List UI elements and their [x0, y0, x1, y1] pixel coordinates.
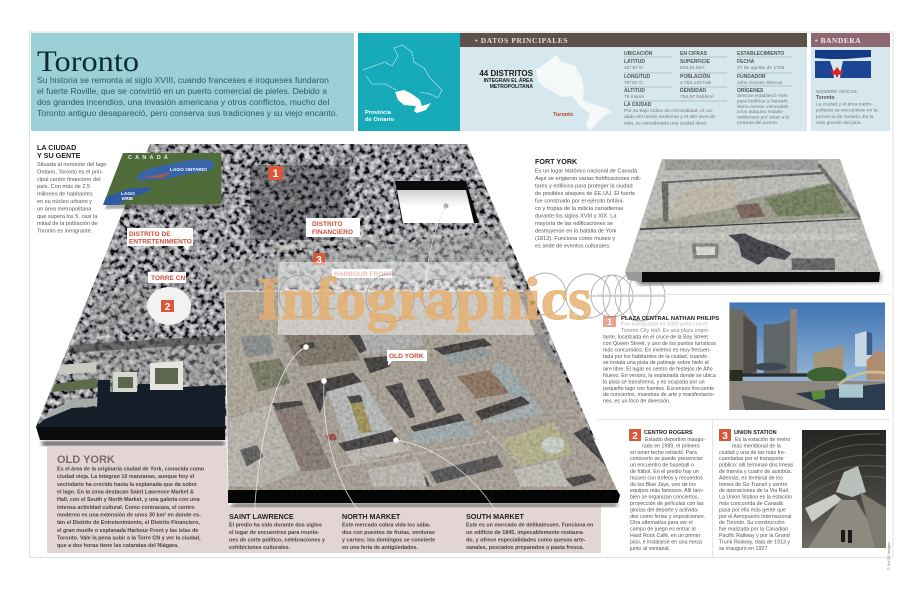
text: South Market: do, y ofrece especialidades como quesos arte-: [466, 538, 586, 544]
text: Plaza Nathan Philips: aire libre. El lugar es centro de festejos de Año: [603, 367, 713, 373]
label: torre CN: [148, 272, 186, 283]
text: Union Station: fue realizada por la Canadian: [719, 527, 788, 533]
column: en cifras: 754,57 hab/km²: [680, 94, 714, 100]
column: en cifras: SUPERFICIE: [680, 59, 711, 65]
photo: Union Station: [802, 430, 886, 548]
text: Saint Lawrence: SAINT LAWRENCE: [229, 512, 294, 521]
text: Centro Rogers: de fútbol. En el predio hay un: [630, 469, 699, 475]
text: Centro Rogers: conocerlo se puede presenciar: [630, 456, 703, 462]
panel: Ontario locator map: [358, 33, 455, 131]
text: Union Station: ciudad y una de las más fre-: [719, 450, 786, 456]
flag text: [816, 89, 878, 126]
text: Centro Rogers: [629, 429, 705, 552]
column: ubicación: dado del medio ambiente y el alto nivel de: [624, 114, 716, 120]
text: Centro Rogers: equipos más famosos. Allí tam-: [630, 488, 704, 494]
text: Centro Rogers: museo con trofeos y recuerdos: [630, 475, 703, 481]
image credit: © Sol 90 Images: [887, 542, 891, 570]
text: Fort York: mayoría de las edificaciones se: [535, 221, 613, 227]
marker 2: [161, 300, 174, 313]
text: la ciudad y su gente: Situada al noroeste del lago: [37, 162, 106, 168]
text: Union Station: Trunk Railway, data de 1913 y: [719, 539, 790, 545]
label: Toronto: Toronto: [553, 112, 574, 118]
text: Plaza Nathan Philips: de conciertos, muestras de arte y manifestacio-: [603, 392, 715, 398]
intro text: Su historia se remonta al siglo XVIII, cuando franceses e iroqueses fundaron: [37, 75, 329, 85]
text: Old York: [57, 454, 205, 549]
marker 1 legend: 1: [607, 317, 612, 327]
text: la ciudad y su gente: país. Con más de 2,5: [37, 184, 90, 190]
text: Centro Rogers: Otra alternativa para ver el: [630, 520, 693, 526]
text: la ciudad y su gente: en su núcleo urbano y: [37, 199, 92, 205]
flag text: provincia de Ontario. Es la: [816, 114, 874, 120]
text: Plaza Nathan Philips: Nuevo. En verano, la explanada donde se ubica: [603, 373, 716, 379]
text: North Market: [342, 512, 435, 551]
label: distrito financiero: [306, 218, 360, 237]
3D map: Fort York: [620, 155, 890, 285]
intro text: dos grandes incendios, una invasión americana y otros conflictos, mucho del: [37, 97, 329, 107]
text: Saint Lawrence: nes de corte político, celebraciones y: [229, 538, 325, 544]
map: Canada outline: [363, 45, 442, 98]
column: en cifras: EN CIFRAS: [680, 51, 708, 57]
pointer: North Market: [321, 378, 358, 510]
marker 3 legend: 3: [722, 431, 728, 442]
label: 44 distritos: INTEGRAN EL ÁREA: [484, 77, 533, 84]
flag text: NOMBRE OFICIAL: [816, 89, 858, 95]
text: Old York: el lago. En la zona destacan Saint Lawrence Market &: [57, 490, 194, 496]
column: establecimiento: FECHA: [737, 59, 755, 65]
text: Old York: Es el área de la originaria ciudad de York, conocida como: [57, 466, 205, 472]
text: Centro Rogers: Estadio deportivo inaugu-: [645, 437, 705, 443]
text: Plaza Nathan Philips: con Queen Street, y uno de los puntos turísticos: [603, 341, 716, 347]
text: Union Station: de Toronto. Su construcción: [719, 520, 785, 526]
text: Union Station: más meridional de la: [732, 443, 781, 449]
watermark band: [257, 262, 665, 335]
text: Plaza Nathan Philips: la pista se transforma, y es ocupada por un: [603, 379, 705, 385]
text: Centro Rogers: rado en 1989, el primero: [642, 443, 700, 449]
text: Union Station: cuentadas por el transporte: [719, 456, 784, 462]
text: North Market: Este mercado cobra vida los sába-: [342, 522, 431, 528]
column: ubicación: LONGITUD: [624, 74, 650, 80]
text: Saint Lawrence: exhibiciones culturales.: [229, 545, 291, 551]
label: Provincia de Ontario: Provincia: [365, 110, 392, 116]
pointer: Saint Lawrence: [255, 344, 309, 518]
text: Fort York: durante los siglos XVIII y XIX. La: [535, 214, 617, 220]
text: Centro Rogers: en tener techo retráctil. Para: [630, 450, 697, 456]
label: distrito financiero: DISTRITO: [312, 221, 343, 228]
text: Centro Rogers: bién se organizan conciertos,: [630, 495, 699, 501]
text: Union Station: público: allí terminan dos líneas: [719, 463, 794, 469]
text: Fort York: FORT YORK: [535, 157, 578, 166]
text: Centro Rogers: campo de juego es entrar al: [630, 527, 696, 533]
text: North Market: en una feria de antigüedades.: [342, 545, 418, 551]
text: South Market: [466, 512, 593, 551]
photo: Toronto City Hall: [729, 302, 885, 411]
text: Plaza Nathan Philips: más concurridos. En invierno es muy frecuen-: [603, 347, 711, 353]
text: Old York: vecindario ha crecido hasta la explanada que da sobre: [57, 482, 197, 488]
label: 44 distritos: 44 DISTRITOS: [479, 69, 534, 78]
text: Old York: intensa actividad cultural. Como contracara, el centro: [57, 505, 195, 511]
text: Fort York: tares y edificios para proteger la ciudad: [535, 184, 633, 190]
text: Union Station: de operaciones de la Via Rail.: [719, 488, 789, 494]
label: Lago Ontario: LAGO ONTARIO: [170, 167, 207, 173]
label: Old York: OLD YORK: [389, 353, 424, 360]
flag text: Toronto: [816, 95, 835, 101]
Rogers Centre dome: [147, 287, 191, 325]
column: en cifras: 629,91 km²: [680, 65, 705, 71]
text: Union Station: trenes de Go Transit y centro: [719, 482, 787, 488]
label: torre CN: TORRE CN: [151, 275, 186, 282]
text: la ciudad y su gente: LA CIUDAD: [37, 143, 76, 152]
column: en cifras: DENSIDAD: [680, 88, 707, 94]
3D map: downtown Toronto: [30, 140, 630, 446]
text: Old York: el gran muelle o explanada Harbour Front y las islas de: [57, 528, 198, 534]
text: Saint Lawrence: el lugar de encuentros para reunio-: [229, 530, 319, 536]
marker 2: 2: [165, 302, 171, 313]
column: en cifras: [680, 51, 727, 100]
column: ubicación: [624, 49, 727, 126]
label: Canadá: CANADÁ: [128, 154, 171, 161]
text: Union Station: pasa por ella más gente que: [719, 507, 786, 513]
column: ubicación: 43°40' N: [624, 65, 643, 71]
column: ubicación: 76 msnm: [624, 94, 644, 100]
text: Old York: Hall, con el South y North Market, y una galería con una: [57, 497, 201, 503]
label: 44 distritos: METROPOLITANA: [490, 84, 533, 90]
label: Old York: [387, 350, 427, 366]
text: Union Station: Pacific Railway y por la Grand: [719, 533, 790, 539]
3D map: Old York block: [220, 285, 630, 518]
column: establecimiento: para fortificar a Newark.: [737, 98, 789, 104]
label: harbour front: HARBOUR FRONT: [334, 271, 392, 278]
marker 2 legend: 2: [632, 431, 638, 442]
column: establecimiento: 27 de agosto de 1793: [737, 65, 785, 71]
marker 1: 1: [272, 168, 279, 180]
text: Union Station: UNION STATION: [734, 430, 777, 436]
label: distrito financiero: FINANCIERO: [312, 229, 353, 236]
column: ubicación: 79°25' O: [624, 80, 643, 86]
text: Centro Rogers: de los Blue Jays, uno de los: [630, 482, 696, 488]
text: Union Station: por el Aeropuerto Internacional: [719, 514, 791, 520]
header: datos principales: • DATOS PRINCIPALES: [475, 36, 568, 45]
text: Centro Rogers: un encuentro de baseball o: [630, 463, 694, 469]
text: Union Station: [719, 429, 794, 552]
column: establecimiento: unidenses por estar a la: [737, 114, 789, 120]
text: la ciudad y su gente: Y SU GENTE: [37, 151, 81, 160]
text: Fort York: Es un lugar histórico nacional de Canadá.: [535, 168, 639, 174]
text: Union Station: se inauguró en 1927.: [719, 546, 769, 552]
text: Old York: ciudad vieja. La integran 10 manzanas, aunque hoy el: [57, 474, 195, 480]
text: Fort York: Aquí se erigieron varias fortificaciones mili-: [535, 176, 641, 182]
text: South Market: un edificio de 1845, impecablemente restaura-: [466, 530, 584, 536]
marker 3: [313, 253, 325, 266]
text: Old York: tán el Distrito de Entretenimiento, el Distrito Financiero,: [57, 520, 200, 526]
column: en cifras: POBLACIÓN: [680, 72, 710, 80]
label: distrito de entretenimiento: ENTRETENIMIENTO: [129, 238, 192, 246]
text: North Market: y carnes; los domingos se convierte: [342, 538, 435, 544]
text: Plaza Nathan Philips: Toronto City Hall. Es una plaza impor-: [621, 328, 710, 334]
flag text: La ciudad y el área metro-: [816, 102, 873, 108]
text: North Market: dos con puestos de frutas, verduras: [342, 530, 435, 536]
column: establecimiento: ESTABLECIMIENTO: [737, 51, 784, 57]
text: Union Station: La Union Station es la estación: [719, 495, 792, 501]
marker 1: [268, 166, 283, 180]
text: Centro Rogers: piso, e instalarse en una mesa: [630, 539, 702, 545]
text: South Market: sanales, pescados preparados o pasta fresca.: [466, 545, 584, 551]
column: ubicación: UBICACIÓN: [624, 49, 653, 57]
text: Plaza Nathan Philips: se instala una pista de patinaje sobre hielo al: [603, 360, 709, 366]
text: Union Station: Es la estación de metro: [735, 437, 790, 443]
text: Plaza Nathan Philips: nes, es un foco de diversión.: [603, 399, 670, 405]
text: Saint Lawrence: [229, 512, 325, 551]
flag text: politana se encuentran en la: [816, 108, 878, 114]
text: Centro Rogers: glorias del deporte y activida-: [630, 507, 699, 513]
text: la ciudad y su gente: Toronto es inmigrante.: [37, 229, 93, 235]
heading: Toronto: Toronto: [37, 46, 139, 78]
text: Plaza Nathan Philips: [603, 316, 719, 405]
map: Ontario highlight: [395, 90, 431, 113]
pointer: South Market: [393, 437, 495, 510]
text: South Market: SOUTH MARKET: [466, 512, 525, 521]
column: establecimiento: a los ataques estado-: [737, 109, 784, 115]
text: Centro Rogers: CENTRO ROGERS: [644, 430, 693, 436]
icon: Toronto flag: [815, 50, 871, 78]
flag text: más grande del país.: [816, 120, 862, 126]
text: la ciudad y su gente: Ontario, Toronto es el prin-: [37, 169, 103, 175]
text: Plaza Nathan Philips: pequeño lago con fuentes. Escenario frecuente: [603, 386, 714, 392]
column: establecimiento: John Graves Simcoe: [737, 80, 783, 86]
divider: [597, 294, 890, 557]
marker 3: 3: [316, 255, 322, 266]
column: ubicación: ALTITUD: [624, 88, 645, 94]
text: la ciudad y su gente: cipal centro financiero del: [37, 177, 100, 183]
column: ubicación: LA CIUDAD: [624, 102, 652, 108]
panel: title: [31, 33, 354, 131]
text: Centro Rogers: Hard Rock Café, en un primer: [630, 533, 701, 539]
label: Lago Erie: ERIE: [122, 196, 134, 202]
column: ubicación: vida, es considerada una ciudad ideal.: [624, 120, 707, 126]
column: en cifras: 4.753.120 hab.: [680, 80, 713, 86]
text: la ciudad y su gente: que supera los 5, casi la: [37, 214, 98, 220]
map: Ontario districts: [536, 55, 612, 131]
text: Fort York: co y tropas de la milicia canadiense: [535, 206, 623, 212]
watermark text: Infographics: [257, 266, 592, 332]
text: Fort York: fue construido por el ejército británi-: [535, 198, 624, 204]
text: Centro Rogers: proyección de películas con las: [630, 501, 704, 507]
text: la ciudad y su gente: millones de habitantes: [37, 192, 93, 198]
text: la ciudad y su gente: un área metropolitana: [37, 206, 92, 212]
text: North Market: NORTH MARKET: [342, 512, 401, 521]
label: distrito de entretenimiento: DISTRITO DE: [129, 231, 171, 238]
text: Union Station: Además, es terminal de los: [719, 475, 783, 481]
header: bandera: • BANDERA: [815, 36, 861, 45]
text: Centro Rogers: des como ferias y exposiciones.: [630, 514, 705, 520]
text: Fort York: (1813). Funciona como museo y: [535, 236, 615, 242]
text: Centro Rogers: junto al ventanal.: [629, 546, 670, 552]
text: Plaza Nathan Philips: tante, localizada en el cruce de la Bay Street: [603, 334, 708, 340]
text: Saint Lawrence: El predio ha sido durante dos siglos: [229, 522, 322, 528]
text: Fort York: destruyeron en la batalla de York: [535, 228, 617, 234]
inset map: Canada and lakes: [103, 153, 222, 209]
text: Plaza Nathan Philips: PLAZA CENTRAL NATHAN PHILIPS: [621, 316, 719, 322]
text: Fort York: [535, 157, 641, 250]
column: establecimiento: Simcoe estableció York: [737, 93, 788, 99]
label: distrito de entretenimiento: [127, 228, 193, 251]
label: Lago Erie: LAGO: [121, 191, 135, 197]
column: ubicación: LATITUD: [624, 59, 645, 65]
text: Union Station: más concurrida de Canadá:: [719, 501, 784, 507]
text: Fort York: de posibles ataques de EE.UU. El fuerte: [535, 191, 635, 197]
lake water: [36, 380, 225, 427]
text: Old York: moderno es una extensión de unos 30 km² en donde es-: [57, 512, 201, 518]
text: Plaza Nathan Philips: Fue inaugurada en 1965 junto con el: [621, 322, 707, 328]
column: ubicación: Por su bajo índice de criminalidad, el cui-: [624, 108, 714, 114]
white building block: [395, 181, 479, 223]
panel: bandera: [811, 33, 890, 131]
pointer: Fort York: [425, 204, 448, 292]
text: la ciudad y su gente: mitad de la población de: [37, 221, 98, 227]
text: Fort York: es sede de eventos culturales.: [535, 244, 611, 250]
text: South Market: Este es un mercado de delikatessen. Funciona en: [466, 522, 593, 528]
intro text: Toronto antiguo desapareció, pero conserva sus tradiciones y su viejo encanto.: [37, 108, 338, 118]
text: Plaza Nathan Philips: tada por los habitantes de la ciudad, cuando: [603, 354, 707, 360]
column: establecimiento: ORÍGENES: [737, 86, 764, 94]
column: establecimiento: entrada del puerto.: [737, 120, 778, 126]
text: Union Station: de tranvía y cuatro de autobús.: [719, 469, 792, 475]
panel: datos principales: [455, 33, 807, 131]
column: establecimiento: [737, 51, 792, 126]
column: establecimiento: Sería menos vulnerable: [737, 104, 789, 110]
column: establecimiento: FUNDADOR: [737, 74, 766, 80]
panel: Old York pink background: [47, 447, 601, 553]
text: Old York: Toronto. Vale la pena subir a la Torre CN y ver la ciudad,: [57, 536, 201, 542]
text: Old York: OLD YORK: [57, 454, 115, 466]
label: Provincia de Ontario: de Ontario: [365, 117, 394, 123]
text: Old York: que a dos horas tiene las cataratas del Niágara.: [57, 543, 179, 549]
text: la ciudad y su gente: [37, 143, 106, 235]
intro text: el fuerte Roville, que se convirtió en un puerto comercial de pieles. Debido a: [37, 86, 327, 96]
